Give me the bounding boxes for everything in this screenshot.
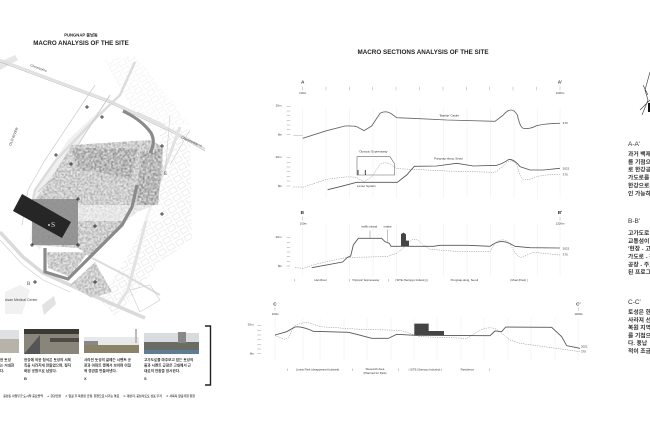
370 lower dashed [293,161,560,187]
section B scale [276,235,290,268]
intake: intake [384,224,392,228]
section B-B' [276,210,570,282]
section C zones: | [287,368,288,372]
section B header: B [301,210,305,215]
label pungnap: Pungnap-dong, Seoul [434,157,463,161]
section A scales [276,103,290,188]
2021 lower profile [328,159,560,190]
translucent analysis band [78,205,163,221]
text: C-C': 다. 풍납 [628,339,648,347]
caption B: 한강에 의한 침식은 토성의 서북 [24,358,71,362]
caption 1: 는 거대한 [0,362,15,368]
title: macro analysis: MACRO ANALYSIS OF THE SITE [33,40,129,47]
section C zones: | [352,368,353,372]
section C scale: 20m [248,323,254,327]
370 upper profile [303,110,560,138]
text: C-C' [628,299,650,355]
section C zones: | [398,368,399,372]
section A scales: 8m [278,184,283,188]
section C-C' [248,302,588,375]
traffic island: traffic island [361,224,378,228]
expressway box [357,157,395,175]
site map [0,55,205,318]
section C-C': 2021 [581,344,588,348]
section B-B': 2021 [563,246,570,250]
green belt [45,111,153,279]
roads [0,60,205,318]
photo 3 X [84,329,139,353]
text: B-B': B-B' [628,218,640,225]
section B zones: | [388,278,389,282]
section A-A': 370 [563,121,568,125]
caption X: 적 경관을 만들어낸다. [84,368,117,373]
site building [414,324,444,335]
section C zones [287,367,490,375]
section C zones: Residence [461,368,474,372]
caption 1: 다. [0,368,4,373]
photo 4 S [144,332,199,354]
site texture [32,140,163,257]
section A header: 100m [299,91,307,95]
south blocks texture [47,252,112,298]
section A scales: 20m [276,103,282,107]
label S: S [51,220,55,229]
section B zones [294,278,528,282]
caption X: 사라진 토성의 끝에는 시멘트 공 [84,358,131,362]
section A-A': 370 [563,172,568,176]
section B zones: 'Olympic' Expressway [352,278,380,282]
section C scale: 8m [250,351,255,355]
map labels: Cheonhodae-ro [181,135,203,148]
highlighted square [32,199,78,245]
section C-C': 370 [581,350,586,354]
text: C-C': C-C' [628,299,641,306]
map labels: Asan Medical Center [5,298,38,302]
dark site block [13,194,71,238]
section C header: C [273,302,277,307]
section B scale: 20m [276,235,282,239]
section A header: 1200m [556,91,565,95]
text: A-A': A-A' [628,141,640,148]
section A header: A [301,80,305,85]
section C zones: Research Area [366,367,385,371]
section B zones: | [294,278,295,282]
section B header [300,210,565,225]
section A scales: 8m [278,133,283,137]
section A-A': 2021 [563,166,570,170]
label B: B [24,376,27,381]
section C zones: | SITE (Sampyo Industry) | [409,368,442,372]
map labels: E [164,172,167,177]
section B header: B' [558,210,562,215]
map labels [5,63,203,302]
label olympic: 'Olympic' Expressway [359,150,388,154]
section B header: 1200m [556,221,565,225]
section C scale [248,323,261,355]
section A header [299,80,565,95]
caption S: 풀과 시멘트 공장은 고대에서 근 [144,362,192,368]
dense texture band [72,148,163,205]
section A scales: 20m [276,155,282,159]
370 dashed [295,239,560,268]
photo strip [0,329,199,354]
map labels: OLD RIVER [8,127,19,146]
urban fabric [0,55,192,316]
section C header [272,302,584,316]
bracket [205,326,210,385]
section A-A' [276,80,570,190]
section B-B': 370 [563,253,568,257]
section B header: 100m [300,221,308,225]
photo 1 [0,330,19,353]
label X: X [84,376,87,381]
section B scale: 8m [278,264,283,268]
section C header: 100m [272,312,280,316]
section C zones: (Planned for Park) [364,371,387,375]
map labels: Cheonbokro [30,63,48,73]
section C header: 1400m [574,312,584,316]
sections title: MACRO SECTIONS ANALYSIS OF THE SITE [357,49,489,56]
2021 profile [275,327,580,348]
grid lines [275,108,578,360]
label S: S [144,376,147,381]
bottom caption: 풍납동 사업부군 도시적 풍요영역 ㅅ 한강공원 ㅈ 발굴 후 복원된 공원, 현장으로 나가는 통로 ㄷ 대상지, 풍납사토토 삼표 부지 ㅈ 사북측 발굴지점 현장 [0,393,195,398]
caption B: 화된 공원으로 남았다. [24,368,57,373]
caption X: 장과 아파트 옆에서 보이며 이질 [84,362,131,368]
370 dashed [275,323,580,352]
text: B-B': '현장 - 고 [628,244,650,252]
title: Pungnap: PUNGNAP 풍납동 [64,32,98,38]
caption 1: 한 토성 [0,358,11,362]
text: B-B' [628,218,650,276]
2021 profile [312,238,560,268]
section C zones: Linear Park (disappeared bulwark) [296,368,339,372]
site building [401,233,409,246]
map crosshairs [30,105,164,284]
section B zones: | SITE (Sampyo Industry) | [395,278,428,282]
section B zones: | [349,278,350,282]
caption S: 고가도로를 마주보고 있는 토성의 [144,358,193,362]
section C header: C' [576,302,581,307]
text: A-A' [628,141,650,198]
section B zones: Pungnap-dong, Seoul [451,278,478,282]
map labels: B [27,282,31,287]
label baekje: 'Baekje' Castle [439,113,459,117]
section A header: A' [558,80,562,85]
caption B: 측을 사라지게 만들었으며, 평지 [24,362,71,368]
photo 2 B [24,329,79,354]
section C zones: | [489,368,490,372]
label levee: Levee System [357,184,376,188]
section B zones: Han River [314,278,327,282]
caption S: 대로의 전환을 암시한다. [144,368,180,373]
section B zones: | Moat (Past) | [510,278,528,282]
key map icon [640,72,650,115]
photo captions [0,357,193,381]
